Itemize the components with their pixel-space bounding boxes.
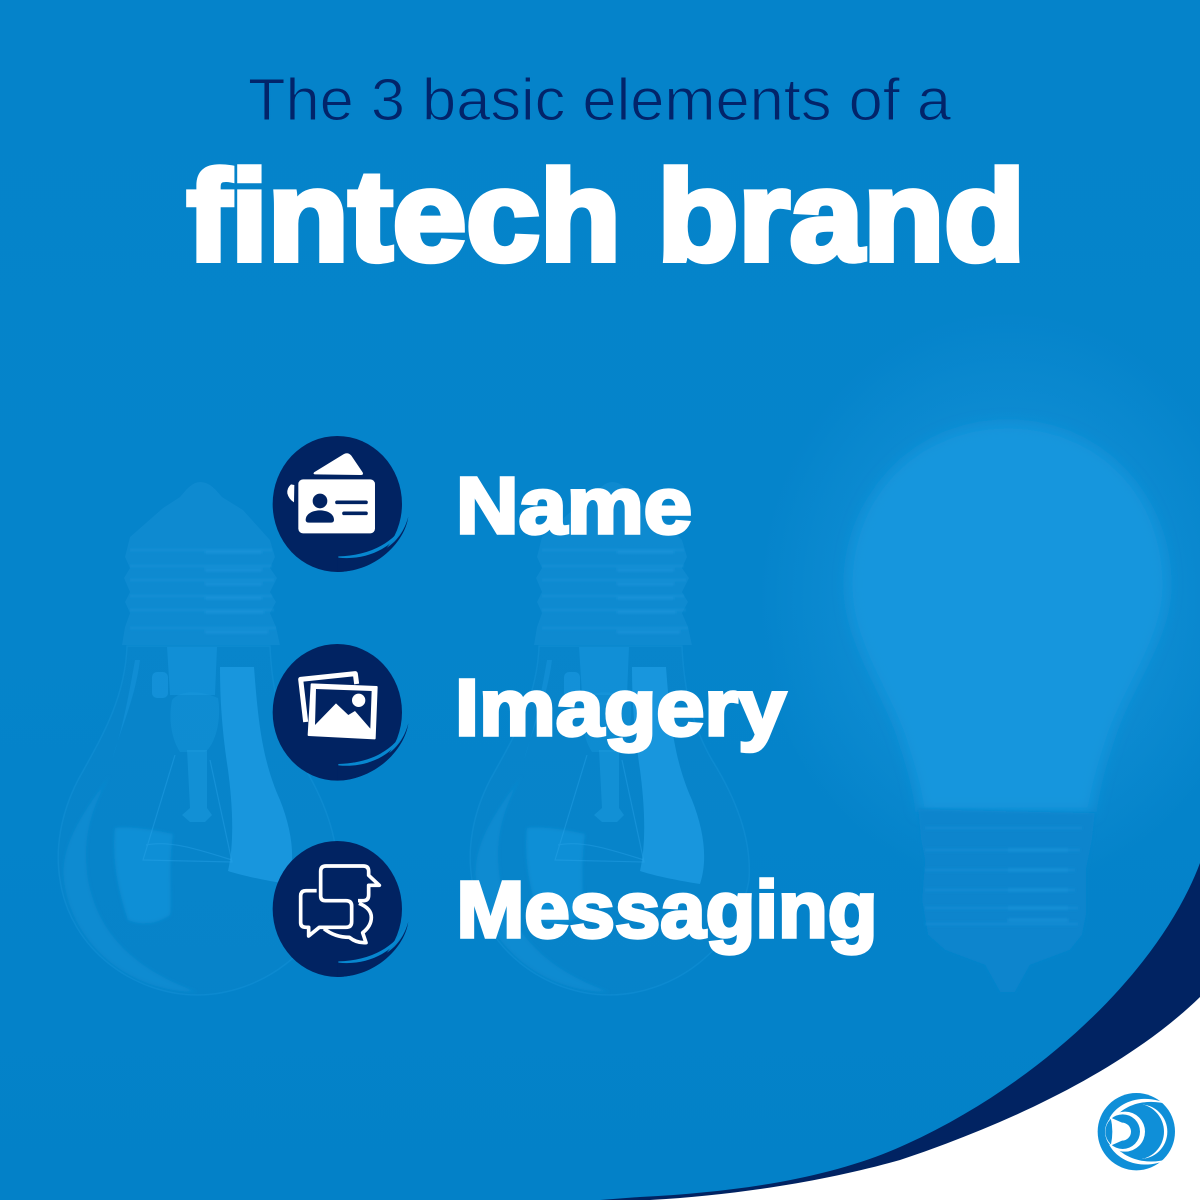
icon: speech bubbles xyxy=(273,841,408,977)
background image: clear bulb left xyxy=(58,482,337,995)
swoosh: navy band xyxy=(600,863,1200,1200)
item: imagery xyxy=(273,644,787,781)
icon: name badge xyxy=(273,436,408,572)
label: Name: Name xyxy=(456,461,692,550)
label: Messaging: Messaging xyxy=(456,865,878,954)
swoosh: white corner xyxy=(650,997,1200,1200)
title: first line: The 3 basic elements of a xyxy=(248,67,951,133)
item: name xyxy=(273,436,692,572)
background image: clear bulb middle xyxy=(470,482,749,995)
background image: glowing bulb right xyxy=(758,310,1200,992)
icon: pictures xyxy=(273,644,408,781)
logo xyxy=(1098,1093,1175,1170)
item: messaging xyxy=(273,841,878,977)
title: second line: fintech brand xyxy=(187,145,1025,288)
label: Imagery: Imagery xyxy=(455,663,787,752)
